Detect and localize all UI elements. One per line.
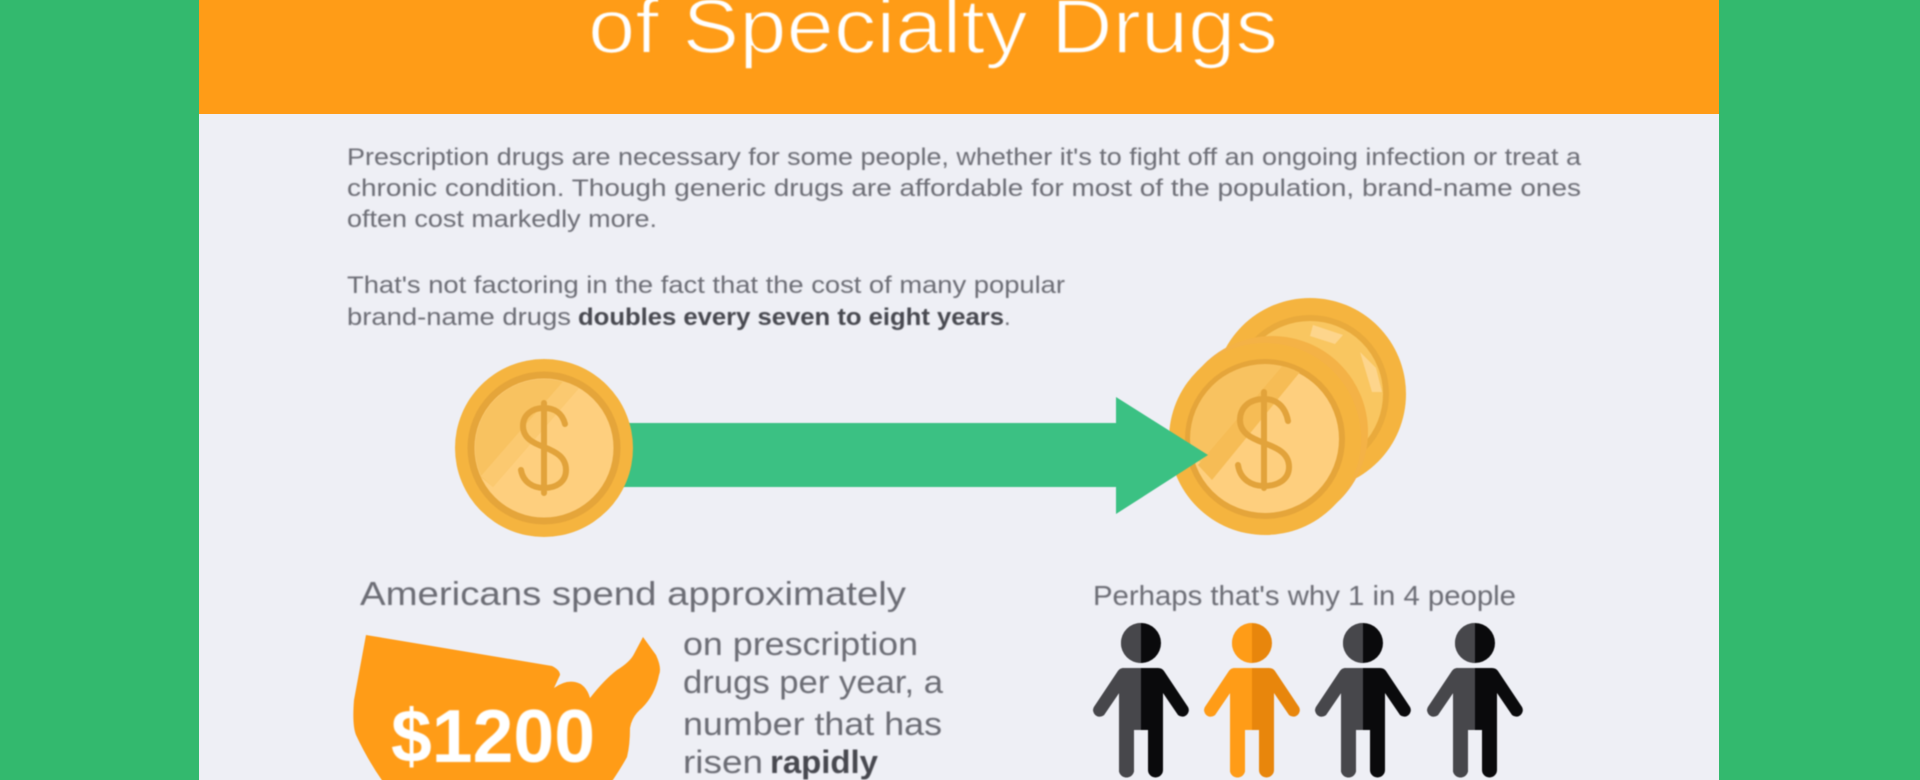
arrow: cost doubling	[610, 397, 1208, 514]
spending description: drugs per year, a	[683, 664, 943, 700]
spending description: on prescription	[683, 626, 918, 662]
doubling cost paragraph: That's not factoring in the fact that the cost of many popular	[347, 272, 1065, 299]
icon: person 3	[1315, 623, 1411, 778]
header banner	[199, 0, 1719, 114]
icon: person 2 highlighted	[1204, 623, 1300, 778]
intro paragraph: often cost markedly more.	[347, 206, 657, 233]
icon: person 4	[1427, 623, 1523, 778]
spending description	[683, 626, 943, 780]
people heading: Perhaps that's why 1 in 4 people	[1093, 580, 1516, 611]
intro paragraph	[347, 144, 1582, 233]
spending description: rapidly	[770, 744, 878, 780]
infographic canvas	[199, 0, 1719, 780]
coin edge shadow	[1176, 336, 1368, 528]
doubling cost paragraph: brand-name drugs	[347, 304, 571, 331]
icon: stacked dollar coins	[1169, 298, 1406, 535]
amount: $1200	[391, 694, 595, 778]
icon: single dollar coin	[455, 359, 633, 537]
pictogram: 1 in 4 people	[1093, 623, 1523, 778]
icon: US map with amount	[353, 635, 660, 780]
front coin	[1168, 358, 1346, 536]
spending description: risen	[683, 744, 763, 780]
content panel	[199, 0, 1719, 780]
banner background	[199, 0, 1719, 114]
intro paragraph: chronic condition. Though generic drugs are affordable for most of the population, brand-name ones	[347, 175, 1581, 202]
doubling cost paragraph: doubles every seven to eight years	[578, 304, 1004, 331]
spending description: number that has	[683, 706, 942, 742]
spending heading: Americans spend approximately	[360, 575, 907, 612]
icon: person 1	[1093, 623, 1189, 778]
back coin	[1226, 297, 1407, 478]
intro paragraph: Prescription drugs are necessary for some people, whether it's to fight off an ongoing infection or treat a	[347, 144, 1582, 171]
doubling cost paragraph: .	[1004, 304, 1011, 331]
doubling cost paragraph	[347, 272, 1065, 331]
